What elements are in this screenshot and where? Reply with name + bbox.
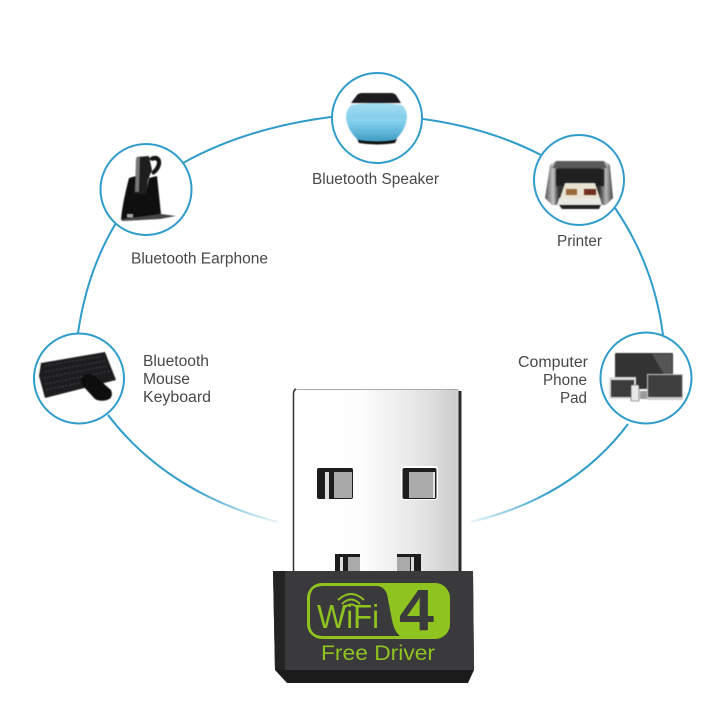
label: Computer Phone Pad: Computer	[518, 354, 588, 371]
label: Bluetooth Earphone: Bluetooth Earphone	[131, 250, 268, 268]
label: Bluetooth Mouse Keyboard: Bluetooth	[143, 353, 209, 370]
left contact window	[317, 468, 353, 499]
USB WiFi dongle	[273, 389, 474, 683]
device: bluetooth speaker	[312, 73, 439, 188]
icon: devices	[609, 353, 683, 401]
USB plug	[293, 389, 461, 571]
label: Computer Phone Pad: Phone	[543, 372, 587, 389]
label: Bluetooth Mouse Keyboard: Mouse	[143, 371, 190, 388]
icon: wifi arcs	[338, 594, 364, 607]
device: printer	[534, 135, 624, 250]
WiFi wordmark: WiFi	[317, 598, 379, 635]
label: Bluetooth Mouse Keyboard	[143, 353, 211, 406]
device: bluetooth earphone	[100, 144, 268, 268]
icon: speaker	[346, 93, 407, 144]
label: Printer: Printer	[557, 233, 602, 250]
label: Computer Phone Pad: Pad	[560, 390, 587, 407]
dongle cap	[273, 571, 474, 683]
icon: printer	[545, 161, 613, 209]
numeral 4: 4	[399, 578, 434, 643]
right contact window	[401, 466, 438, 500]
label: Bluetooth Speaker: Bluetooth Speaker	[312, 171, 439, 188]
label: Computer Phone Pad	[518, 354, 588, 407]
device: computer phone pad	[518, 332, 692, 424]
icon: keyboard	[39, 352, 116, 401]
device: keyboard and mouse	[34, 334, 211, 424]
lower contact slots	[335, 554, 421, 571]
Free Driver: Free Driver	[321, 642, 435, 665]
connection arcs	[78, 117, 663, 522]
green badge	[307, 578, 450, 643]
icon: earphone on dock	[121, 156, 176, 221]
label: Bluetooth Mouse Keyboard: Keyboard	[143, 389, 211, 406]
